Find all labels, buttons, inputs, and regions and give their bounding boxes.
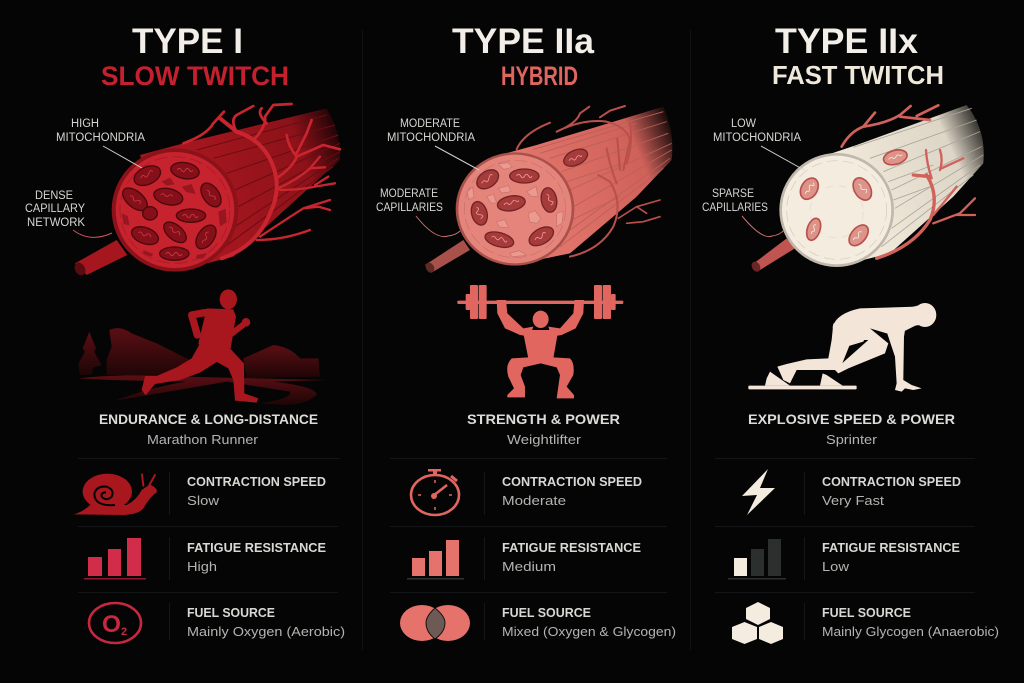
text: fuel source glycogen: Mainly Glycogen (Anaerobic) [822,624,999,639]
text: fuel source oxygen: Mainly Oxygen (Aerobic) [187,624,345,639]
icon: oxygen O2: 2 [121,626,127,638]
text: explosive specialty: Sprinter [826,432,878,447]
panel: Type IIa hybrid [376,22,676,641]
callout: low mitochondria: MITOCHONDRIA [713,132,801,144]
text: fuel source mixed: Mixed (Oxygen & Glycogen) [502,624,676,639]
text: strength specialty: Weightlifter [507,432,582,447]
icon: marathon runner [78,289,327,405]
callout: sparse capillaries [702,188,784,237]
icon: oxygen O2: O [102,611,121,638]
text: fatigue resistance medium [502,541,641,574]
icon: snail [74,474,157,515]
callout: dense capillary network: DENSE [35,190,73,202]
text: fatigue resistance high: FATIGUE RESISTANCE [187,541,326,555]
text: contraction speed slow: CONTRACTION SPEED [187,475,326,489]
callout: dense capillary network: CAPILLARY [25,203,85,215]
callout: low mitochondria [713,118,804,170]
text: explosive specialty [748,411,955,447]
text: contraction speed moderate: Moderate [502,493,566,508]
text: contraction speed very fast: CONTRACTION SPEED [822,475,961,489]
heading: Type I: TYPE I [132,22,243,61]
text: contraction speed moderate: CONTRACTION SPEED [502,475,642,489]
landscape [78,328,327,405]
callout: sparse capillaries: SPARSE [712,188,754,200]
callout: sparse capillaries: CAPILLARIES [702,202,768,214]
callout: dense capillary network: NETWORK [27,217,85,229]
text: endurance specialty: ENDURANCE & LONG-DISTANCE [99,411,318,427]
text: strength specialty [467,411,620,447]
muscle fiber illustration: Type IIx [750,105,984,273]
text: fuel source oxygen: FUEL SOURCE [187,606,275,620]
text: fatigue resistance low [822,541,960,574]
text: fatigue resistance medium: Medium [502,559,556,574]
heading: Type IIa: TYPE IIa [452,22,595,61]
icon: stopwatch [411,469,459,515]
heading: Type IIx [772,22,944,90]
heading: Type I: SLOW TWITCH [101,61,289,91]
text: fatigue resistance medium: FATIGUE RESISTANCE [502,541,641,555]
text: endurance specialty [99,411,318,447]
callout: high mitochondria [56,118,145,168]
panel: Type I slow twitch [25,22,345,643]
text: fuel source mixed [502,606,676,639]
icon: glycogen hexagons [732,602,783,644]
heading: Type IIx: TYPE IIx [775,22,919,61]
text: fuel source glycogen: FUEL SOURCE [822,606,911,620]
icon: bars medium [407,540,464,580]
icon: bars high [84,538,146,580]
text: fatigue resistance low: Low [822,559,850,574]
text: fatigue resistance low: FATIGUE RESISTANCE [822,541,960,555]
muscle fiber illustration: Type I [72,104,340,277]
text: contraction speed very fast: Very Fast [822,493,884,508]
heading: Type IIa [452,22,595,91]
heading: Type IIx: FAST TWITCH [772,60,944,90]
heading: Type IIa: HYBRID [501,61,578,91]
text: contraction speed moderate [502,475,642,508]
icon: sprinter [748,303,936,392]
callout: moderate capillaries: CAPILLARIES [376,202,443,214]
callout: high mitochondria: HIGH [71,118,99,130]
text: endurance specialty: Marathon Runner [147,432,259,447]
callout: high mitochondria: MITOCHONDRIA [56,132,145,144]
text: strength specialty: STRENGTH & POWER [467,411,620,427]
text: contraction speed slow: Slow [187,493,220,508]
callout: low mitochondria: LOW [731,118,756,130]
panel: Type IIx fast twitch [702,22,999,644]
callout: moderate capillaries: MODERATE [380,188,438,200]
callout: moderate capillaries [376,188,460,237]
callout: moderate mitochondria [387,118,479,170]
callout: moderate mitochondria: MITOCHONDRIA [387,132,475,144]
icon: mixed fuel venn [400,605,470,641]
icon: bars low [728,539,786,580]
icon: oxygen O2 [89,603,141,643]
callout: dense capillary network [25,190,112,237]
text: contraction speed very fast [822,475,961,508]
icon: lightning bolt [742,469,775,515]
text: fatigue resistance high [187,541,326,574]
text: contraction speed slow [187,475,326,508]
heading: Type I [101,22,289,91]
text: fuel source oxygen [187,606,345,639]
text: explosive specialty: EXPLOSIVE SPEED & POWER [748,411,955,427]
text: fuel source glycogen [822,606,999,639]
text: fatigue resistance high: High [187,559,217,574]
callout: moderate mitochondria: MODERATE [400,118,460,130]
muscle fiber illustration: Type IIa [424,106,672,274]
text: fuel source mixed: FUEL SOURCE [502,606,591,620]
icon: weightlifter [457,285,623,398]
